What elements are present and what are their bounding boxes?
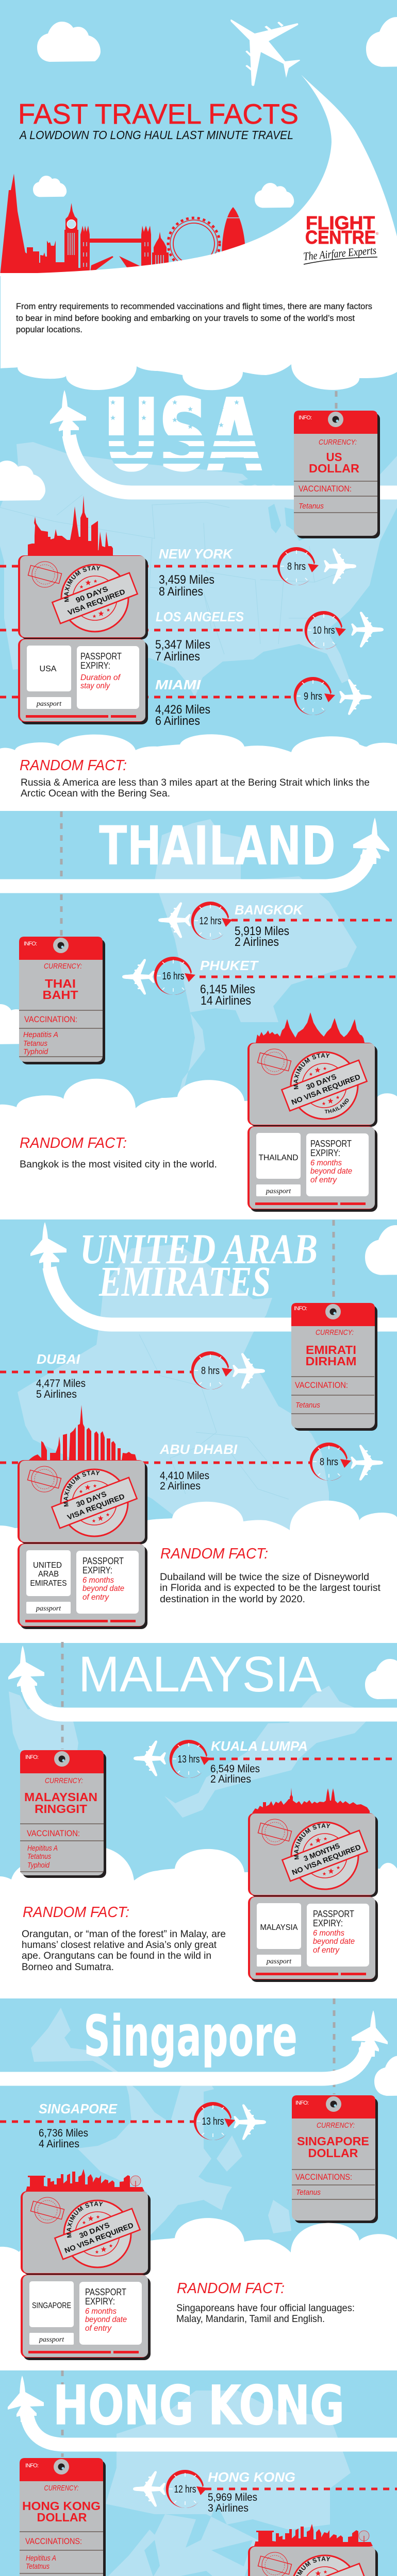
- tag: UAE info: INFO:: [294, 1306, 307, 1312]
- section: Thailand: [0, 811, 397, 1097]
- passport: USA: PASSPORT: [80, 651, 122, 662]
- map: Malaysia: [9, 1686, 372, 1818]
- passport: Malaysia: MALAYSIA: [260, 1923, 298, 1932]
- passport: Thailand: THAILAND: [325, 1098, 349, 1113]
- hero panel: [0, 17, 397, 390]
- route: Abu Dhabi: [0, 1442, 383, 1492]
- panel: Malaysia random fact: Borneo and Sumatra.: [22, 1961, 114, 1973]
- tag: Malaysia info: RINGGIT: [35, 1802, 87, 1816]
- tag: Singapore info: Tetanus: [296, 2188, 321, 2197]
- passport: Thailand: PASSPORT: [310, 1139, 352, 1149]
- panel: Thailand random fact: [0, 1079, 397, 1219]
- tag: UAE info: CURRENCY:: [316, 1328, 354, 1337]
- plane: trail head: [8, 1646, 44, 1692]
- tag: USA info: [294, 411, 380, 538]
- section: Singapore: [0, 1998, 397, 2236]
- cloud: left: [0, 1004, 39, 1044]
- plane: trail head: [8, 2376, 44, 2422]
- route: Bangkok: BANGKOK: [235, 902, 304, 918]
- route: Los Angeles: LOS ANGELES: [156, 609, 244, 624]
- tag: Singapore info: SINGAPORE: [297, 2134, 369, 2148]
- connector: dashed tag line: [335, 391, 337, 410]
- tag: Hong Kong info: HONG KONG: [22, 2499, 101, 2513]
- panel: Thailand random fact: Bangkok is the most visited city in the world.: [20, 1159, 217, 1170]
- passport: Singapore: passport: [39, 2336, 64, 2344]
- passport: Malaysia: passport: [266, 1958, 292, 1965]
- route: Los Angeles: [0, 609, 384, 664]
- cloud: hero near logo: [255, 183, 294, 208]
- panel: UAE random fact: Dubailand will be twice the size of Disneyworld: [160, 1571, 369, 1583]
- passport: Thailand: [247, 1043, 377, 1212]
- logo: Flight Centre: [303, 212, 379, 264]
- trail line: [0, 2043, 368, 2079]
- route: New York: 8 Airlines: [159, 585, 203, 599]
- passport: Singapore: MAXIMUM STAY: [67, 2201, 103, 2238]
- tag: Malaysia info: Hepititus A: [27, 1844, 58, 1853]
- passport: Singapore: 30 DAYS: [78, 2221, 111, 2240]
- map: UAE: [18, 1244, 329, 1546]
- panel: Malaysia random fact: RANDOM FACT:: [23, 1904, 129, 1921]
- tag: Malaysia info: INFO:: [25, 1754, 39, 1760]
- route: Dubai: 4,477 Miles: [36, 1377, 86, 1389]
- route: Miami: 4,426 Miles: [155, 703, 210, 717]
- section: USA: [0, 379, 397, 728]
- passport: UAE: of entry: [82, 1593, 109, 1602]
- route: Miami: MIAMI: [155, 677, 201, 692]
- route: Kuala Lumpa: KUALA LUMPA: [211, 1738, 308, 1754]
- tag: USA info: VACCINATION:: [299, 484, 352, 494]
- tag: Malaysia info: [20, 1750, 106, 1878]
- logo: Flight Centre: FLIGHT: [306, 212, 375, 233]
- tag: Singapore info: INFO:: [295, 2100, 309, 2106]
- passport: UAE: VISA REQUIRED: [66, 1492, 126, 1521]
- trail line: [49, 1267, 397, 1325]
- route: Los Angeles: 5,347 Miles: [155, 638, 210, 652]
- passport: USA: passport: [36, 700, 62, 708]
- white swoosh trail and lower band: [0, 75, 397, 390]
- map: Hong Kong: [106, 2391, 351, 2576]
- passport: UAE: 30 DAYS: [75, 1489, 108, 1509]
- panel: Malaysia random fact: ape. Orangutans can be found in the wild in: [22, 1950, 211, 1961]
- tag: Singapore info: [292, 2095, 378, 2223]
- passport: UAE: ARAB: [38, 1570, 59, 1579]
- passport: Singapore: 6 months: [85, 2307, 117, 2316]
- passport: Malaysia: beyond date: [313, 1937, 355, 1946]
- cloud: hero top right: [366, 17, 397, 67]
- London skyline: [0, 174, 245, 276]
- cloud: hero above shard: [33, 176, 67, 197]
- plane: trail head: [352, 2010, 388, 2057]
- passport: Malaysia: 3 MONTHS: [303, 1841, 341, 1862]
- route: Dubai: DUBAI: [37, 1351, 80, 1367]
- passport: UAE: PASSPORT: [82, 1556, 124, 1566]
- route: Singapore: 6,736 Miles: [39, 2127, 88, 2139]
- panel: USA random fact: Russia & America are less than 3 miles apart at the Bering Strait which links the: [21, 777, 370, 788]
- logo: Flight Centre: The Airfare Experts: [303, 244, 377, 263]
- intro text: to bear in mind before booking and embarking on your travels to some of the world’s most: [16, 314, 355, 323]
- route: Bangkok: 2 Airlines: [235, 935, 279, 949]
- tag: Hong Kong info: Hepititus A: [26, 2554, 56, 2563]
- passport: Malaysia: of entry: [313, 1946, 340, 1955]
- route: Miami: [0, 677, 372, 728]
- heading: Malaysia: MALAYSIA: [78, 1646, 322, 1702]
- passport: Thailand: MAXIMUM STAY: [293, 1053, 330, 1089]
- tag: Thailand info: THAI: [45, 977, 76, 990]
- tag: Hong Kong info: VACCINATIONS:: [25, 2536, 82, 2546]
- tag: Hong Kong info: CURRENCY:: [44, 2484, 78, 2493]
- tag: UAE info: [291, 1303, 377, 1431]
- tag: Hong Kong info: INFO:: [25, 2463, 39, 2469]
- route: Hong Kong: [133, 2469, 397, 2514]
- passport: Singapore: SINGAPORE: [32, 2301, 71, 2310]
- panel: Singapore random fact: Malay, Mandarin, Tamil and English.: [176, 2313, 325, 2325]
- heading: United Arab Emirates: UNITED ARAB: [80, 1225, 318, 1273]
- passport: Malaysia: MAXIMUM STAY: [294, 1823, 330, 1860]
- route: Phuket: 6,145 Miles: [200, 982, 255, 996]
- passport: Singapore: of entry: [85, 2324, 112, 2333]
- panel: Malaysia random fact: [0, 1846, 397, 1998]
- trail line: [26, 2411, 397, 2445]
- skyline: New York: [28, 496, 113, 555]
- route: Miami: 9 hrs: [304, 691, 322, 702]
- connector: dashed tag line: [332, 1220, 335, 1302]
- passport: Thailand: of entry: [310, 1176, 337, 1184]
- route: Kuala Lumpa: 6,549 Miles: [210, 1762, 260, 1775]
- route: New York: 8 hrs: [287, 561, 306, 572]
- trail line: [27, 1681, 397, 1715]
- passport: UAE: EMIRATES: [30, 1579, 67, 1588]
- plane: trail head: [50, 390, 86, 436]
- route: Bangkok: 12 hrs: [199, 916, 222, 927]
- section: Hong Kong: [8, 2370, 397, 2576]
- cloud: hero top left: [37, 22, 101, 62]
- route: Hong Kong: 3 Airlines: [208, 2502, 249, 2514]
- tag: Thailand info: Typhoid: [23, 1047, 48, 1056]
- route: Hong Kong: 5,969 Miles: [208, 2491, 257, 2503]
- connector: dashed tag line: [61, 2370, 64, 2457]
- route: Singapore: [0, 2101, 266, 2150]
- tag: Thailand info: Tetanus: [23, 1039, 47, 1048]
- passport: Singapore: NO VISA REQUIRED: [63, 2221, 135, 2255]
- passport: USA: 90 DAYS: [74, 584, 109, 604]
- passport: UAE: MAXIMUM STAY: [63, 1470, 100, 1506]
- heading: United Arab Emirates: [80, 1225, 318, 1305]
- route: Singapore: SINGAPORE: [39, 2101, 118, 2116]
- tag: Singapore info: VACCINATIONS:: [295, 2172, 352, 2182]
- route: New York: 3,459 Miles: [159, 573, 214, 587]
- section: Malaysia: [8, 1642, 397, 1818]
- title: FAST TRAVEL FACTS: [18, 98, 299, 130]
- route: Phuket: 14 Airlines: [201, 994, 251, 1008]
- passport: UAE: [18, 1460, 147, 1629]
- passport: Singapore: EXPIRY:: [85, 2296, 115, 2307]
- route: Dubai: 5 Airlines: [36, 1388, 77, 1400]
- skyline: Dubai: [29, 1405, 137, 1460]
- cloud: right: [374, 2056, 397, 2096]
- tag: Hong Kong info: Tetatnus: [26, 2562, 49, 2571]
- tag: Thailand info: INFO:: [24, 941, 37, 947]
- tag: USA info: INFO:: [299, 415, 312, 421]
- route: Hong Kong: HONG KONG: [208, 2469, 295, 2485]
- tag: Thailand info: VACCINATION:: [24, 1014, 77, 1024]
- tag: Malaysia info: Tetatnus: [27, 1852, 51, 1861]
- tag: UAE info: Tetanus: [295, 1401, 320, 1410]
- passport: Thailand: NO VISA REQUIRED: [290, 1073, 361, 1106]
- route: Dubai: [0, 1351, 265, 1400]
- intro text: popular locations.: [16, 325, 82, 334]
- route: Abu Dhabi: 2 Airlines: [160, 1480, 201, 1492]
- passport: Thailand: passport: [266, 1188, 291, 1195]
- map: Singapore region: [31, 2008, 291, 2236]
- subtitle: A LOWDOWN TO LONG HAUL LAST MINUTE TRAVEL: [19, 128, 293, 142]
- trail line: [69, 435, 397, 493]
- passport: Thailand: 30 DAYS: [305, 1072, 338, 1091]
- tag: Malaysia info: VACCINATION:: [27, 1828, 80, 1838]
- panel: USA random fact: [0, 734, 397, 811]
- passport: Malaysia: EXPIRY:: [313, 1918, 343, 1928]
- route: Los Angeles: 10 hrs: [312, 625, 335, 636]
- route: Miami: 6 Airlines: [155, 714, 200, 728]
- route: Bangkok: 5,919 Miles: [235, 924, 289, 938]
- skyline: Thailand temples: [256, 1012, 365, 1043]
- cloud: right: [365, 1225, 397, 1275]
- route: Abu Dhabi: 4,410 Miles: [160, 1469, 209, 1482]
- tag: Hong Kong info: [20, 2458, 106, 2576]
- heading: USA: USA: [104, 379, 261, 492]
- map: Thailand: [155, 819, 357, 1097]
- route: Los Angeles: 7 Airlines: [155, 650, 200, 664]
- skyline: Kuala Lumpur: [252, 1788, 370, 1813]
- route: Bangkok: [158, 902, 397, 949]
- passport: Singapore: [21, 2191, 151, 2360]
- passport: USA: VISA REQUIRED: [67, 587, 126, 617]
- panel: USA random fact: RANDOM FACT:: [20, 757, 127, 774]
- panel: UAE random fact: [0, 1501, 397, 1643]
- skyline: Hong Kong: [254, 2524, 373, 2546]
- passport: USA: stay only: [80, 682, 110, 690]
- map: USA: [0, 442, 397, 697]
- route: Kuala Lumpa: 2 Airlines: [210, 1773, 251, 1785]
- passport: Hong Kong: [248, 2546, 378, 2576]
- route: Abu Dhabi: 8 hrs: [320, 1456, 338, 1468]
- plane: trail head: [353, 818, 389, 864]
- route: Phuket: [122, 957, 397, 1008]
- tag: Thailand info: BAHT: [42, 988, 78, 1002]
- route: Phuket: PHUKET: [200, 958, 259, 973]
- hero plane: [230, 20, 300, 86]
- passport: UAE: EXPIRY:: [82, 1565, 112, 1575]
- panel: UAE random fact: in Florida and is expected to be the largest tourist: [160, 1582, 381, 1594]
- panel: Malaysia random fact: Orangutan, or “man of the forest” in Malay, are: [22, 1928, 226, 1940]
- tag: Thailand info: [19, 937, 105, 1064]
- trail line: [0, 850, 370, 886]
- tag: Malaysia info: Typhoid: [27, 1861, 50, 1870]
- passport: USA: USA: [39, 665, 57, 673]
- passport: USA: Duration of: [80, 673, 121, 682]
- logo: Flight Centre: CENTRE: [305, 227, 376, 248]
- panel: UAE random fact: RANDOM FACT:: [160, 1546, 268, 1562]
- skyline: Singapore: [26, 2169, 144, 2191]
- route: Hong Kong: 12 hrs: [174, 2484, 196, 2495]
- tag: Thailand info: CURRENCY:: [44, 962, 82, 971]
- route: Singapore: 4 Airlines: [39, 2138, 79, 2150]
- tag: Malaysia info: MALAYSIAN: [24, 1790, 97, 1804]
- passport: Singapore: PASSPORT: [85, 2287, 126, 2297]
- connector: dashed tag line: [61, 1642, 64, 1749]
- passport: UAE: UNITED: [33, 1561, 62, 1570]
- tag: USA info: DOLLAR: [309, 462, 359, 475]
- intro text: [16, 302, 372, 334]
- tag: Singapore info: DOLLAR: [308, 2146, 358, 2160]
- passport: Malaysia: [248, 1813, 378, 1982]
- route: Kuala Lumpa: 13 hrs: [177, 1754, 200, 1765]
- tag: USA info: CURRENCY:: [319, 438, 357, 447]
- passport: Singapore: beyond date: [85, 2315, 127, 2324]
- plane: trail head: [30, 1222, 67, 1268]
- cloud: left: [0, 461, 45, 501]
- tag: Singapore info: CURRENCY:: [317, 2121, 355, 2130]
- passport: Malaysia: NO VISA REQUIRED: [291, 1843, 362, 1876]
- passport: Thailand: EXPIRY:: [310, 1148, 340, 1158]
- heading: United Arab Emirates: EMIRATES: [98, 1258, 271, 1305]
- panel: Singapore random fact: Singaporeans have four official languages:: [176, 2302, 355, 2314]
- tag: Hong Kong info: DOLLAR: [37, 2511, 87, 2524]
- passport: UAE: beyond date: [82, 1584, 124, 1593]
- section: United Arab Emirates: [0, 1220, 397, 1546]
- cloud: right: [365, 1659, 397, 1699]
- route: New York: [0, 546, 356, 599]
- panel: USA random fact: Arctic Ocean with the Bering Sea.: [21, 788, 170, 799]
- tag: UAE info: VACCINATION:: [295, 1380, 348, 1390]
- panel: Singapore random fact: RANDOM FACT:: [177, 2280, 285, 2297]
- passport: Thailand: 6 months: [310, 1159, 342, 1167]
- intro text: From entry requirements to recommended vaccinations and flight times, there are many factors: [16, 302, 372, 311]
- logo: Flight Centre: ®: [376, 232, 379, 236]
- route: Singapore: 13 hrs: [202, 2116, 224, 2127]
- tag: USA info: Tetanus: [299, 502, 324, 511]
- panel: Singapore random fact: [0, 2218, 397, 2370]
- passport: USA: [18, 555, 148, 724]
- panel: UAE random fact: destination in the world by 2020.: [160, 1594, 305, 1605]
- route: Abu Dhabi: ABU DHABI: [159, 1442, 238, 1457]
- route: Dubai: 8 hrs: [201, 1365, 220, 1377]
- connector: dashed tag line: [60, 811, 63, 936]
- tag: Thailand info: Hepatitis A: [23, 1030, 58, 1039]
- panel: Thailand random fact: RANDOM FACT:: [20, 1135, 127, 1151]
- passport: Malaysia: 6 months: [313, 1929, 344, 1938]
- panel: Malaysia random fact: humans’ closest relative and Asia’s only great: [22, 1939, 217, 1951]
- passport: Thailand: THAILAND: [259, 1154, 298, 1162]
- connector: dashed tag line: [333, 1998, 335, 2094]
- route: Phuket: 16 hrs: [162, 971, 185, 982]
- tag: UAE info: EMIRATI: [306, 1343, 356, 1357]
- passport: USA: MAXIMUM STAY: [64, 566, 101, 602]
- route: New York: NEW YORK: [159, 546, 234, 562]
- passport: USA: EXPIRY:: [80, 660, 110, 671]
- passport: Malaysia: PASSPORT: [313, 1909, 354, 1919]
- tag: USA info: US: [326, 450, 342, 464]
- route: Kuala Lumpa: [134, 1738, 397, 1785]
- passport: Thailand: beyond date: [310, 1167, 352, 1176]
- tag: UAE info: DIRHAM: [305, 1354, 357, 1368]
- passport: UAE: passport: [36, 1605, 61, 1613]
- passport: UAE: 6 months: [82, 1576, 114, 1585]
- tag: Malaysia info: CURRENCY:: [45, 1776, 83, 1785]
